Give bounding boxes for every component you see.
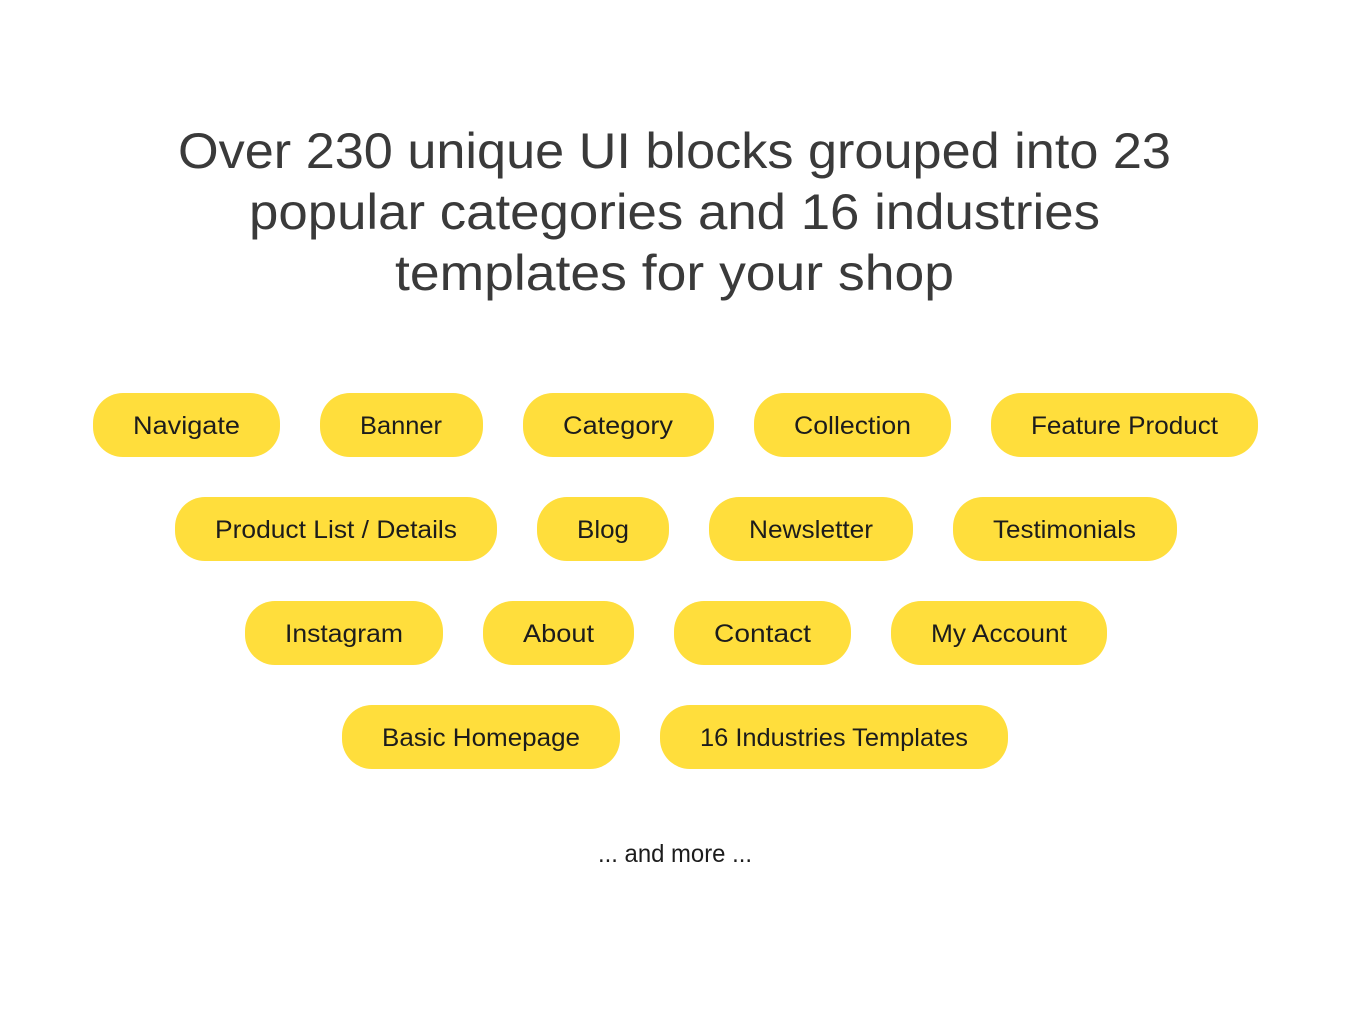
title: templates for your shop	[395, 245, 954, 301]
pill: Blog	[537, 497, 669, 561]
pill: Blog: Blog	[577, 516, 629, 544]
pill: Feature Product: Feature Product	[1031, 412, 1218, 440]
pill: Instagram: Instagram	[285, 620, 403, 648]
title: popular categories and 16 industries	[249, 184, 1100, 240]
pill: Newsletter: Newsletter	[749, 516, 873, 544]
pill: Category: Category	[563, 412, 674, 440]
pill: Collection: Collection	[794, 412, 911, 440]
footer note: ... and more ...	[598, 840, 752, 868]
pill: Banner	[320, 393, 483, 457]
pill: Basic Homepage: Basic Homepage	[382, 724, 580, 752]
pill: About	[483, 601, 634, 665]
pill: 16 Industries Templates: 16 Industries Templates	[700, 724, 968, 752]
pill: Newsletter	[709, 497, 913, 561]
pill: 16 Industries Templates	[660, 705, 1008, 769]
pill: My Account: My Account	[931, 620, 1067, 648]
pill: Testimonials: Testimonials	[993, 516, 1136, 544]
pill: Product List / Details: Product List / Details	[215, 516, 457, 544]
title: Over 230 unique UI blocks grouped into 23	[178, 123, 1171, 179]
pill: Navigate	[93, 393, 280, 457]
pill: Contact	[674, 601, 851, 665]
pill: Category	[523, 393, 714, 457]
pill: Collection	[754, 393, 951, 457]
pill: My Account	[891, 601, 1107, 665]
pill: Navigate: Navigate	[133, 412, 240, 440]
pill: About: About	[523, 620, 594, 648]
pill: Feature Product	[991, 393, 1258, 457]
pill: Testimonials	[953, 497, 1177, 561]
pill: Contact: Contact	[714, 620, 811, 648]
title	[178, 123, 1171, 301]
pill: Instagram	[245, 601, 443, 665]
pill: Product List / Details	[175, 497, 497, 561]
pill: Basic Homepage	[342, 705, 620, 769]
pill: Banner: Banner	[360, 412, 442, 440]
